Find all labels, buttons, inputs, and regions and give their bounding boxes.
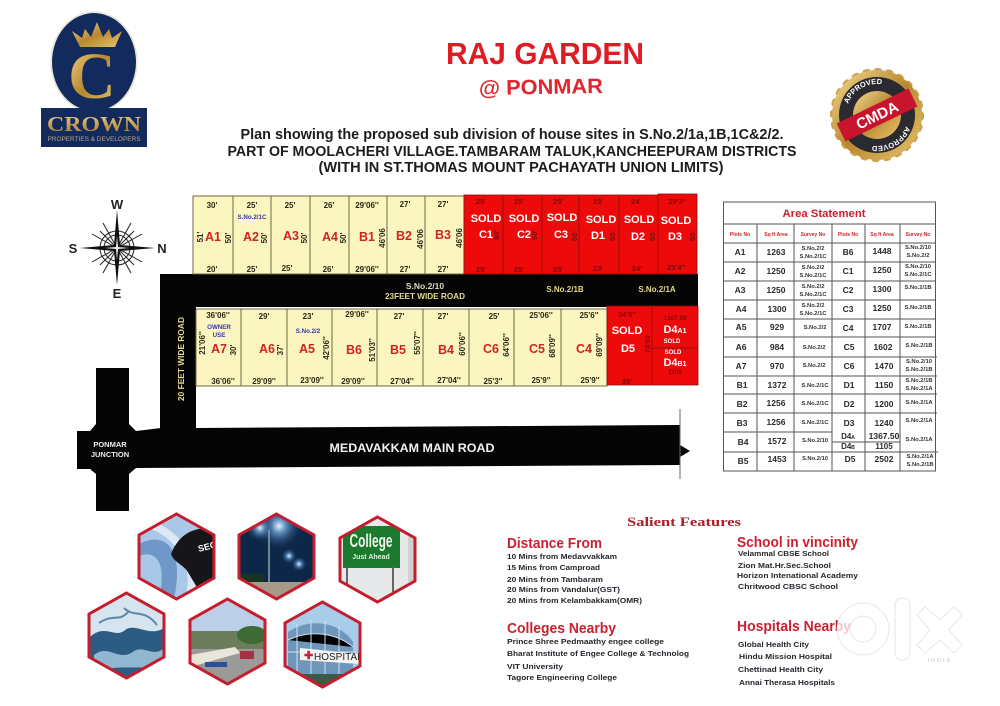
block: hospitals nearby: Hospitals Nearby xyxy=(737,619,851,635)
plot D2 sold: 24' xyxy=(632,264,642,273)
table rows left half: 1256 xyxy=(767,398,786,408)
plot D5 sold xyxy=(607,306,652,386)
plot C2 sold: 25' xyxy=(514,197,524,206)
block: distance from xyxy=(507,536,643,605)
hexagon photo: college sign xyxy=(340,517,415,602)
plot D1 sold: SOLD xyxy=(586,214,616,226)
table header: Plots No xyxy=(838,232,858,238)
logo: Crown Properties & Developers: PROPERTIES & DEVELOPERS xyxy=(48,136,140,143)
table rows right half xyxy=(841,245,934,468)
plot D3 sold: SOLD xyxy=(661,215,691,227)
table rows right half: C1 xyxy=(843,266,854,276)
table: area statement xyxy=(723,202,938,471)
plot A7: 36'06'' xyxy=(206,311,230,320)
plot C6: 64'06'' xyxy=(502,333,511,357)
plot B6: 29'06'' xyxy=(345,310,369,319)
table rows left half: 1263 xyxy=(767,247,786,257)
table rows left half: S.No.2/1C xyxy=(799,254,827,260)
table rows right half: 1300 xyxy=(873,284,892,294)
table rows right half: S.No.2/10 xyxy=(905,245,931,251)
logo: Crown Properties & Developers: CROWN xyxy=(47,112,141,136)
plot C6: 25' xyxy=(489,312,499,321)
plot A7: 30' xyxy=(229,345,238,355)
plot D3 sold: D3 xyxy=(668,231,682,243)
compass rose: E xyxy=(113,286,122,301)
plot D4 sold xyxy=(652,306,698,385)
plot D4 sold: SOLD xyxy=(665,350,682,356)
plot C1 sold xyxy=(464,195,503,274)
plots: top row xyxy=(193,194,697,274)
table rows right half: 1448 xyxy=(873,246,892,256)
plot C4: 25'9'' xyxy=(580,376,600,385)
table rows right half: 1240 xyxy=(875,418,894,428)
block: school in vincinity xyxy=(737,535,859,591)
table header xyxy=(730,232,930,238)
plot D4 sold: D4A1 xyxy=(663,324,687,336)
hexagon photo: traffic junction xyxy=(190,599,267,684)
plot B4: 27'04'' xyxy=(437,376,461,385)
plot A7: OWNER xyxy=(207,324,231,331)
table rows right half: B6 xyxy=(843,247,854,257)
table rows left half: 1250 xyxy=(767,285,786,295)
table rows left half: S.No.2/2 xyxy=(802,265,824,271)
table rows left half: 1372 xyxy=(768,380,787,390)
table rows right half: S.No.2/1A xyxy=(905,386,933,392)
plot D3 sold xyxy=(658,194,697,274)
plot D4 sold: 1105 xyxy=(668,369,682,376)
plot B4: B4 xyxy=(438,343,454,357)
table rows right half: S.No.2/1B xyxy=(905,367,933,373)
plot C1 sold: C1 xyxy=(479,229,493,241)
table rows right half: S.No.2/10 xyxy=(906,359,932,365)
table header: Survey No xyxy=(801,232,825,238)
block: hospitals nearby: Global Health City xyxy=(738,640,810,649)
table rows left half: A4 xyxy=(736,304,747,314)
plot C3 sold: 50' xyxy=(570,231,579,241)
table rows right half: D1 xyxy=(844,380,855,390)
table rows right half: S.No.2/1C xyxy=(904,272,932,278)
plot D4 sold: 1367.50 xyxy=(663,315,687,322)
block: hospitals nearby: Chettinad Health City xyxy=(738,665,824,674)
plot B3 xyxy=(425,196,464,274)
table rows right half: S.No.2/1A xyxy=(906,454,934,460)
table rows right half: S.No.2/1B xyxy=(905,378,933,384)
road labels: 20 FEET WIDE ROAD xyxy=(176,317,186,401)
table header: Sq ft Area xyxy=(764,232,788,238)
block: school in vincinity: Horizon Intenational Academy xyxy=(737,571,859,580)
plot D5 sold: SOLD xyxy=(612,325,642,337)
salient features heading: Salient Features xyxy=(627,514,741,529)
plot C3 sold: C3 xyxy=(554,229,568,241)
plot A1: 20' xyxy=(207,265,217,274)
table rows right half: 1105 xyxy=(875,442,893,451)
plot A2: 25' xyxy=(247,265,257,274)
table rows right half: C6 xyxy=(844,361,855,371)
table rows right half: S.No.2/1B xyxy=(904,305,932,311)
table rows left half: B3 xyxy=(737,418,748,428)
hexagon photo: street lights xyxy=(239,502,314,599)
table rows right half: S.No.2/1B xyxy=(904,324,932,330)
plot A5 xyxy=(287,309,332,386)
plot B3: 46'06 xyxy=(455,228,464,248)
plot A2: S.No.2/1C xyxy=(238,214,267,221)
table rows left half: S.No.2/1C xyxy=(799,292,827,298)
table rows right half: D2 xyxy=(844,399,855,409)
plot A3 xyxy=(271,196,310,274)
plot C6: 25'3'' xyxy=(483,377,503,386)
plot C5: 25'9'' xyxy=(531,376,551,385)
plot C2 sold xyxy=(503,195,542,274)
table rows left half: S.No.2/2 xyxy=(802,246,824,252)
plot C4: 69'09'' xyxy=(595,333,604,357)
table rows right half: D4B xyxy=(841,442,855,451)
plot B4: 27' xyxy=(438,312,448,321)
plot C2 sold: 25' xyxy=(514,265,524,274)
table rows right half: 1250 xyxy=(873,265,892,275)
table rows right half: S.No.2/1B xyxy=(905,343,933,349)
hexagon photo: hospital: HOSPITAL xyxy=(314,652,363,663)
block: school in vincinity: Chritwood CBSC School xyxy=(738,582,838,591)
table rows left half: A6 xyxy=(736,342,747,352)
table rows left half: A2 xyxy=(735,266,746,276)
hexagon photo: college sign: College xyxy=(350,531,392,551)
plot B5: 55'07'' xyxy=(413,331,422,355)
road labels: 23FEET WIDE ROAD xyxy=(385,291,465,301)
plot B3: 27' xyxy=(438,265,448,274)
table rows left half: S.No.2/1C xyxy=(801,420,829,426)
table rows right half: 1250 xyxy=(873,303,892,313)
plot C3 sold xyxy=(542,195,579,274)
plan description: Plan showing the proposed sub division of house sites in S.No.2/1a,1B,1C&2/2. xyxy=(240,127,784,143)
road labels: JUNCTION xyxy=(91,450,129,459)
plan description xyxy=(228,127,797,176)
plot D2 sold xyxy=(619,195,658,274)
plot A4: 26' xyxy=(323,265,333,274)
block: distance from: 10 Mins from Medavvakkam xyxy=(507,552,617,561)
plot C2 sold: C2 xyxy=(517,229,531,241)
plot B2 xyxy=(387,196,425,274)
plot A5: S.No.2/2 xyxy=(296,328,321,335)
plot D5 sold: 35' xyxy=(622,377,632,386)
plot C1 sold: 25' xyxy=(476,265,486,274)
table rows right half: D3 xyxy=(844,418,855,428)
plot B2: 27' xyxy=(400,265,410,274)
plot B5 xyxy=(377,309,423,386)
road labels: S.No.2/1A xyxy=(638,285,676,294)
table rows right half: C3 xyxy=(843,304,854,314)
hexagon photo: college sign: Just Ahead xyxy=(352,554,390,561)
plot C1 sold: 25' xyxy=(476,197,486,206)
table rows left half: S.No.2/2 xyxy=(803,345,825,351)
plot D1 sold: 23' xyxy=(593,197,603,206)
plot A2: A2 xyxy=(243,230,259,244)
plot D1 sold: 23' xyxy=(593,264,603,273)
plot A1: 30' xyxy=(207,201,217,210)
plot C3 sold: SOLD xyxy=(547,212,577,224)
table rows right half: D5 xyxy=(845,454,856,464)
hexagon photo: hospital: ✚ xyxy=(304,650,313,662)
table rows left half: S.No.2/2 xyxy=(803,363,825,369)
table rows right half: 1707 xyxy=(873,322,892,332)
plot D2 sold: 24' xyxy=(631,197,641,206)
plot A3: 25' xyxy=(285,201,295,210)
table rows right half: D4A xyxy=(841,432,855,441)
hexagon photo: water xyxy=(89,593,164,678)
plot C6 xyxy=(469,309,514,386)
block: distance from: Distance From xyxy=(507,536,602,552)
table rows right half: S.No.2/1A xyxy=(905,418,933,424)
plot A1: 51' xyxy=(196,232,205,242)
plot A1: A1 xyxy=(205,230,221,244)
plot B4 xyxy=(423,309,469,386)
plot B6: 51'03'' xyxy=(368,338,377,362)
plot D3 sold: 29'3'' xyxy=(668,197,686,206)
block: distance from: 20 Mins from Tambaram xyxy=(507,575,603,584)
watermark: OLX India xyxy=(837,598,962,664)
table rows left half: 970 xyxy=(770,361,784,371)
table rows left half: S.No.2/1C xyxy=(799,311,827,317)
plot B2: 46'06 xyxy=(416,229,425,249)
table rows left half: 1572 xyxy=(768,436,787,446)
table header: Plots No xyxy=(730,232,750,238)
table rows right half: S.No.2/1B xyxy=(906,462,934,468)
table rows left half: S.No.2/1C xyxy=(801,401,829,407)
table rows right half: 1602 xyxy=(874,342,893,352)
plot D1 sold: D1 xyxy=(591,230,605,242)
table rows left half: S.No.2/2 xyxy=(802,284,824,290)
plot B6: 29'09'' xyxy=(341,377,365,386)
table rows right half: C5 xyxy=(844,342,855,352)
plot C1 sold: SOLD xyxy=(471,213,501,225)
plot A4: 50' xyxy=(339,233,348,243)
table rows left half: 1250 xyxy=(767,266,786,276)
plot B3: B3 xyxy=(435,228,451,242)
plot C2 sold: 50' xyxy=(530,230,539,240)
table rows left half: B1 xyxy=(737,380,748,390)
table rows left half: A3 xyxy=(735,285,746,295)
plot B6 xyxy=(332,309,377,386)
plot A4: A4 xyxy=(322,230,338,244)
hexagon photo: hospital xyxy=(285,602,363,687)
block: school in vincinity: Zion Mat.Hr.Sec.School xyxy=(738,561,831,570)
plot A6: 29' xyxy=(259,312,269,321)
plot C2 sold: SOLD xyxy=(509,213,539,225)
plot A5: 23'09'' xyxy=(300,376,324,385)
plot A5: A5 xyxy=(299,342,315,356)
table rows right half: S.No.2/1B xyxy=(904,285,932,291)
plot D2 sold: D2 xyxy=(631,231,645,243)
plot B1: 46'06 xyxy=(378,228,387,248)
road labels xyxy=(91,281,676,459)
roads xyxy=(77,274,698,511)
plot C5 xyxy=(514,309,561,386)
plot C1 sold: 50' xyxy=(492,230,501,240)
plot A5: 23' xyxy=(303,312,313,321)
plot A6: 37' xyxy=(276,345,285,355)
table rows left half: A7 xyxy=(736,361,747,371)
block: hospitals nearby xyxy=(737,619,851,687)
table rows right half: S.No.2/1A xyxy=(905,437,933,443)
plot A6: A6 xyxy=(259,342,275,356)
block: school in vincinity: Velammal CBSE School xyxy=(738,549,829,558)
plot C5: C5 xyxy=(529,342,545,356)
plot C4: 25'6'' xyxy=(579,311,599,320)
block: hospitals nearby: Hindu Mission Hospital xyxy=(739,652,832,661)
block: distance from: 15 Mins from Camproad xyxy=(507,563,600,572)
table rows left half: B4 xyxy=(738,437,749,447)
plot A4 xyxy=(310,196,349,274)
table rows right half: 1150 xyxy=(875,380,893,390)
plot B1 xyxy=(349,196,387,274)
plot C3 sold: 25' xyxy=(553,265,563,274)
plot D5 sold: 74'02 xyxy=(643,335,652,353)
table header: Sq ft Area xyxy=(870,232,894,238)
block: colleges nearby: Prince Shree Pedmaathy engee college xyxy=(507,637,664,646)
block: colleges nearby: Colleges Nearby xyxy=(507,621,616,637)
plot D3 sold: 50' xyxy=(688,231,697,241)
badge: CMDA approved: APPROVED xyxy=(844,78,882,104)
plot A7: A7 xyxy=(211,342,227,356)
table rows left half: A5 xyxy=(736,322,747,332)
table rows left half: S.No.2/2 xyxy=(804,325,826,331)
badge: CMDA approved xyxy=(830,68,924,162)
block: school in vincinity: School in vincinity xyxy=(737,535,858,551)
title: RAJ GARDEN xyxy=(446,36,644,71)
compass rose: S xyxy=(69,241,78,256)
badge: CMDA approved: CMDA xyxy=(853,98,902,133)
watermark: OLX India: INDIA xyxy=(928,658,952,664)
plot B1: B1 xyxy=(359,230,375,244)
plot B5: 27' xyxy=(394,312,404,321)
plot A7 xyxy=(196,309,241,386)
table: area statement: Area Statement xyxy=(782,208,866,220)
plot D5 sold: D5 xyxy=(621,343,635,355)
plot A4: 26' xyxy=(324,201,334,210)
table rows right half: S.No.2/10 xyxy=(905,264,931,270)
table rows left half xyxy=(735,246,829,466)
compass rose xyxy=(69,197,167,301)
table rows left half: 1300 xyxy=(768,304,787,314)
plot B1: 29'06'' xyxy=(355,265,379,274)
table rows left half: S.No.2/10 xyxy=(802,438,828,444)
block: hospitals nearby: Annai Therasa Hospitals xyxy=(739,678,835,687)
table rows left half: 984 xyxy=(770,342,784,352)
plot C6: C6 xyxy=(483,342,499,356)
plot C4: C4 xyxy=(576,342,592,356)
plan description: PART OF MOOLACHERI VILLAGE.TAMBARAM TALUK,KANCHEEPURAM DISTRICTS xyxy=(228,144,797,160)
plot A2 xyxy=(233,196,271,274)
plot A3: 25' xyxy=(282,264,292,273)
plot A3: 50' xyxy=(300,233,309,243)
plots: bottom row xyxy=(196,306,698,386)
table rows right half: C4 xyxy=(843,323,854,333)
table rows right half: S.No.2/2 xyxy=(907,253,929,259)
plot B3: 27' xyxy=(438,200,448,209)
plot A7: 36'06'' xyxy=(211,377,235,386)
table rows right half: 1367.50 xyxy=(869,431,900,441)
plot D2 sold: 50' xyxy=(648,231,657,241)
table rows left half: B5 xyxy=(738,456,749,466)
plot B2: 27' xyxy=(400,200,410,209)
plot D2 sold: SOLD xyxy=(624,214,654,226)
plot C5: 68'09'' xyxy=(548,334,557,358)
block: colleges nearby: Bharat Institute of Engee College & Technolog xyxy=(507,649,689,658)
hexagon photo: security xyxy=(139,514,218,599)
logo: Crown Properties & Developers: C xyxy=(68,40,116,113)
plot A5: 42'06'' xyxy=(322,336,331,360)
subtitle: @ PONMAR xyxy=(479,75,603,100)
table rows right half: 2502 xyxy=(875,454,894,464)
plot B2: B2 xyxy=(396,229,412,243)
table header: Survey No xyxy=(906,232,930,238)
plot C3 sold: 25' xyxy=(553,197,563,206)
compass rose: N xyxy=(157,241,167,256)
plot A6: 29'09'' xyxy=(252,377,276,386)
plot A6 xyxy=(241,309,287,386)
block: colleges nearby xyxy=(507,621,689,682)
road labels: PONMAR xyxy=(93,440,127,449)
table rows left half: S.No.2/1C xyxy=(799,273,827,279)
plot D1 sold xyxy=(579,195,619,274)
plot B4: 60'06'' xyxy=(458,332,467,356)
hexagon photo: security: SEC xyxy=(197,539,218,554)
table rows right half: 1470 xyxy=(875,361,894,371)
table rows right half: S.No.2/1A xyxy=(905,400,933,406)
table rows left half: 1453 xyxy=(768,454,787,464)
plot D4 sold: D4B1 xyxy=(663,357,687,369)
table rows left half: B2 xyxy=(737,399,748,409)
compass rose: W xyxy=(111,197,124,212)
table rows left half: A1 xyxy=(735,247,746,257)
plot B5: B5 xyxy=(390,343,406,357)
plot C4 xyxy=(561,309,607,386)
road labels: S.No.2/1B xyxy=(546,285,584,294)
plot A1: 50' xyxy=(224,233,233,243)
table rows left half: 1256 xyxy=(767,417,786,427)
road labels: S.No.2/10 xyxy=(406,281,444,291)
plot B6: B6 xyxy=(346,343,362,357)
table rows left half: S.No.2/1C xyxy=(801,383,829,389)
plan description: (WITH IN ST.THOMAS MOUNT PACHAYATH UNION LIMITS) xyxy=(318,160,724,176)
plot B5: 27'04'' xyxy=(390,377,414,386)
plot C5: 25'06'' xyxy=(529,311,553,320)
block: colleges nearby: Tagore Engineering College xyxy=(507,673,617,682)
plot D1 sold: 50' xyxy=(608,231,617,241)
block: distance from: 20 Mins from Vandalur(GST) xyxy=(507,585,621,594)
plot A7: USE xyxy=(213,332,225,339)
plot B1: 29'06'' xyxy=(355,201,379,210)
block: distance from: 20 Mins from Kelambakkam(OMR) xyxy=(507,596,643,605)
table rows right half: 1200 xyxy=(875,399,894,409)
plot A2: 25' xyxy=(247,201,257,210)
plot D5 sold: 34'6'' xyxy=(618,310,636,319)
plot A2: 50' xyxy=(260,233,269,243)
badge: CMDA approved: APPROVED xyxy=(872,126,910,152)
plot D3 sold: 23'4'' xyxy=(667,263,685,272)
table rows left half: S.No.2/2 xyxy=(802,303,824,309)
plot A1 xyxy=(193,196,233,274)
table rows left half: S.No.2/10 xyxy=(802,456,828,462)
plot D4 sold: SOLD xyxy=(664,339,681,345)
plot A7: 21'06'' xyxy=(198,331,207,355)
road labels: MEDAVAKKAM MAIN ROAD xyxy=(330,441,495,455)
table rows right half: C2 xyxy=(843,285,854,295)
block: colleges nearby: VIT University xyxy=(507,662,564,671)
table rows left half: 929 xyxy=(770,322,784,332)
plot A3: A3 xyxy=(283,229,299,243)
logo: Crown Properties & Developers xyxy=(41,12,147,147)
